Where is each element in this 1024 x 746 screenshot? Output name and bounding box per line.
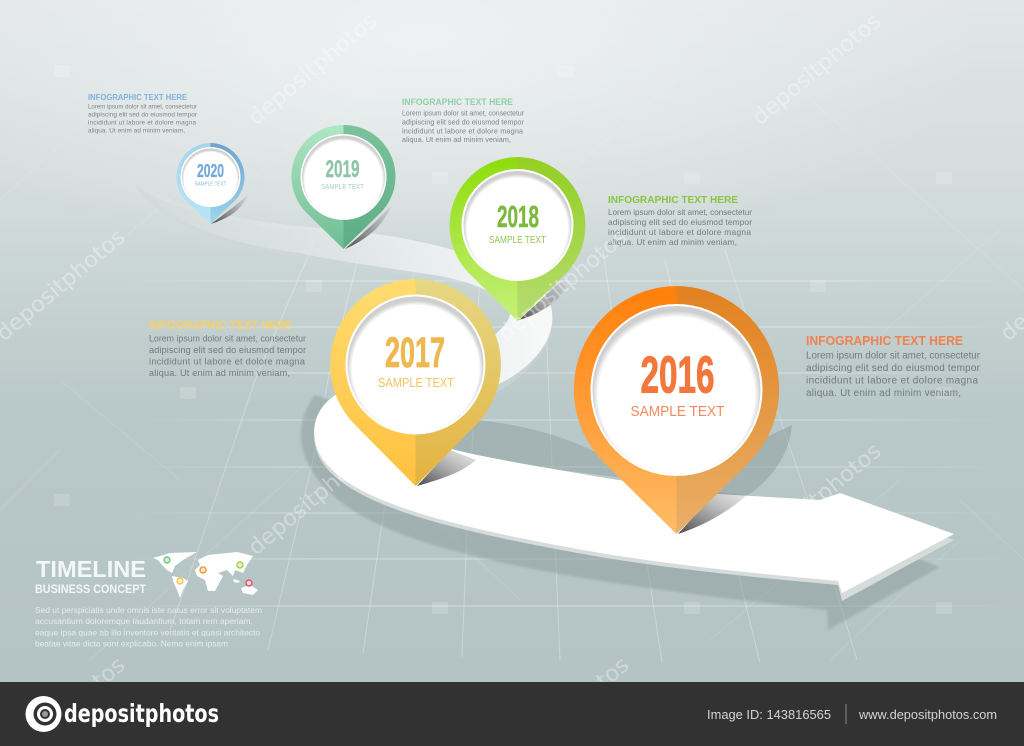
text block: 2018: adipiscing elit sed do eiusmod tempor xyxy=(608,217,752,227)
perspective grid xyxy=(130,240,1010,663)
sample text 2018: SAMPLE TEXT xyxy=(489,235,546,246)
road: arrow ground shadow xyxy=(301,395,940,630)
year 2019: 2019 xyxy=(326,156,360,183)
text block: 2017: Lorem ipsum dolor sit amet, consectetur xyxy=(149,334,306,344)
road: arrow near section xyxy=(314,352,954,601)
watermarks: depositphotos xyxy=(494,225,632,347)
text block: 2016 xyxy=(806,334,981,399)
year 2017: 2017 xyxy=(385,329,445,377)
title: timeline: BUSINESS CONCEPT xyxy=(35,584,146,596)
heading 2016: INFOGRAPHIC TEXT HERE xyxy=(806,334,963,348)
text block: 2017: incididunt ut labore et dolore magna xyxy=(149,356,306,366)
text block: 2016: aliqua. Ut enim ad minim veniam, xyxy=(806,388,961,399)
world map icon xyxy=(153,552,258,598)
timeline description: Sed ut perspiciatis unde omnis iste natus error sit voluptatem xyxy=(35,605,262,615)
pin: 2018 xyxy=(450,157,585,321)
text block: 2020: adipiscing elit sed do eiusmod tempor xyxy=(88,112,198,118)
watermarks: depositphotos xyxy=(244,439,382,561)
text block: 2020: Lorem ipsum dolor sit amet, consectetur xyxy=(88,104,198,110)
heading 2020: INFOGRAPHIC TEXT HERE xyxy=(88,93,188,102)
text block: 2019: aliqua. Ut enim ad minim veniam, xyxy=(402,135,511,144)
pin: 2020 xyxy=(176,143,248,224)
pin: 2019 xyxy=(292,125,395,249)
text block: 2019: adipiscing elit sed do eiusmod tempor xyxy=(402,118,525,126)
text block: 2020: incididunt ut labore et dolore magna xyxy=(88,120,196,126)
watermarks: depositphotos xyxy=(748,9,886,131)
year 2020: 2020 xyxy=(197,161,224,181)
text block: 2016: incididunt ut labore et dolore magna xyxy=(806,376,978,386)
footer logo wordmark: depositphotos xyxy=(64,699,219,728)
title: timeline: TIMELINE xyxy=(36,556,146,582)
footer logo icon xyxy=(26,696,62,732)
timeline description: accusantium doloremque laudantium, totam rem aperiam, xyxy=(35,616,253,626)
text block: 2020: aliqua. Ut enim ad minim veniam, xyxy=(88,128,185,134)
sample text 2016: SAMPLE TEXT xyxy=(630,403,724,420)
heading 2018: INFOGRAPHIC TEXT HERE xyxy=(608,194,738,206)
text block: 2016: adipiscing elit sed do eiusmod tempor xyxy=(806,363,981,374)
sample text 2020: SAMPLE TEXT xyxy=(194,182,227,188)
year 2018: 2018 xyxy=(497,199,539,234)
text block: 2019: incididunt ut labore et dolore magna xyxy=(402,126,523,136)
text block: 2016: Lorem ipsum dolor sit amet, consectetur xyxy=(806,350,981,362)
road: far winding section xyxy=(133,178,552,419)
text block: 2017: adipiscing elit sed do eiusmod tempor xyxy=(149,345,306,355)
text block: 2020 xyxy=(88,93,198,134)
year 2016: 2016 xyxy=(640,346,714,404)
sample text 2019: SAMPLE TEXT xyxy=(321,182,364,191)
text block: 2018: incididunt ut labore et dolore magna xyxy=(608,227,751,237)
text block: 2019 xyxy=(402,97,525,144)
pin: 2017 xyxy=(330,279,501,486)
timeline description: eaque ipsa quae ab illo inventore veritatis et quasi architecto xyxy=(35,628,260,638)
pin: 2016 xyxy=(574,286,779,534)
title: timeline xyxy=(35,556,146,596)
text block: 2018: Lorem ipsum dolor sit amet, consectetur xyxy=(608,207,752,217)
image id: Image ID: 143816565 xyxy=(707,708,831,722)
heading 2017: INFOGRAPHIC TEXT HERE xyxy=(149,320,292,332)
website: www.depositphotos.com xyxy=(858,708,997,722)
sample text 2017: SAMPLE TEXT xyxy=(378,376,454,390)
text block: 2018 xyxy=(608,194,752,247)
watermarks: depositphotos xyxy=(244,9,382,131)
footer bar xyxy=(0,682,1024,746)
watermark camera marks xyxy=(54,65,952,614)
text block: 2017 xyxy=(149,320,306,378)
timeline description: beatae vitae dicta sunt explicabo. Nemo enim ipsam xyxy=(35,638,228,648)
timeline description xyxy=(35,605,262,648)
text block: 2019: Lorem ipsum dolor sit amet, consectetur xyxy=(402,108,525,118)
heading 2019: INFOGRAPHIC TEXT HERE xyxy=(402,97,513,107)
text block: 2017: aliqua. Ut enim ad minim veniam, xyxy=(149,368,290,378)
watermarks: depositphotos xyxy=(748,439,886,561)
text block: 2018: aliqua. Ut enim ad minim veniam, xyxy=(608,237,737,247)
